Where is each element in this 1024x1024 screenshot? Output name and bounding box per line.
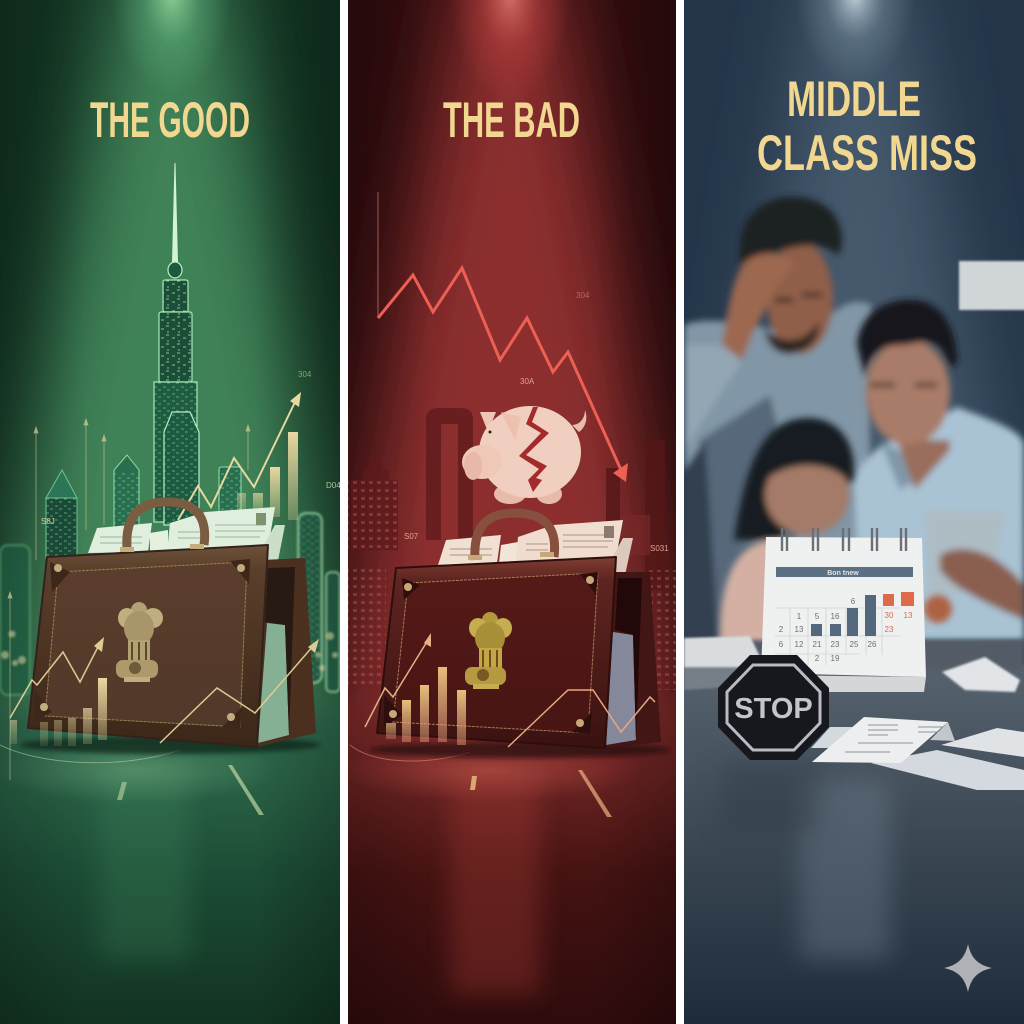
calendar red days xyxy=(883,592,914,606)
icon: right small tower xyxy=(219,467,241,517)
chart: upper rising line and bars: S8J xyxy=(41,517,55,526)
icon: national emblem xyxy=(465,612,512,689)
blurred paper stack xyxy=(684,636,1020,692)
chart: bars and line on case xyxy=(365,633,466,745)
table xyxy=(684,640,1024,1024)
panel: the bad xyxy=(348,0,676,1024)
falling line chart with arrow: S031 xyxy=(650,544,669,553)
title: the good: THE GOOD xyxy=(90,92,250,148)
calendar numbers: 23 xyxy=(831,640,840,649)
calendar numbers: 30 xyxy=(885,611,894,620)
calendar numbers xyxy=(779,597,913,663)
papers xyxy=(88,507,285,560)
calendar numbers: 16 xyxy=(831,612,840,621)
blurred paper on the wall xyxy=(959,261,1024,310)
blurred skyline xyxy=(0,513,340,695)
calendar xyxy=(761,528,926,692)
chart: upper rising line and bars: 304 xyxy=(298,370,312,379)
shirt and shoulders xyxy=(684,302,874,660)
panel: middle class miss xyxy=(684,0,1024,1024)
green background xyxy=(0,0,370,1024)
head xyxy=(767,242,833,354)
floor shadow xyxy=(370,742,670,758)
family, blurred xyxy=(684,197,1024,660)
icon: national emblem xyxy=(116,602,163,682)
floor shadow xyxy=(20,736,320,754)
title: middle class miss: MIDDLE xyxy=(787,71,921,127)
calendar numbers: 5 xyxy=(815,612,820,621)
calendar numbers: 6 xyxy=(851,597,856,606)
icon: cracked piggy bank xyxy=(462,406,586,504)
falling line chart with arrow: S07 xyxy=(404,532,419,541)
father xyxy=(684,197,874,660)
icon: briefcase xyxy=(377,513,661,748)
calendar numbers: 2 xyxy=(815,654,820,663)
child xyxy=(720,418,952,660)
icon: stop sign: STOP xyxy=(734,693,813,725)
icon: sparkle watermark xyxy=(944,944,992,992)
mother xyxy=(854,300,1024,640)
handle xyxy=(127,502,205,548)
calendar numbers: 26 xyxy=(868,640,877,649)
falling line chart with arrow: 30A xyxy=(520,377,535,386)
calendar numbers: 2 xyxy=(779,625,784,634)
chart: overlay line right xyxy=(160,639,319,743)
receipts on table xyxy=(811,717,1024,790)
binder rings xyxy=(782,528,906,551)
corner plates xyxy=(34,559,250,728)
bokeh lights xyxy=(1,630,338,671)
raised hand xyxy=(722,253,795,360)
corner studs xyxy=(40,544,245,721)
handle xyxy=(475,513,555,560)
calendar numbers: 13 xyxy=(795,625,804,634)
city towers xyxy=(46,163,241,558)
chart: overlay line left on case xyxy=(10,637,107,746)
case front xyxy=(377,557,616,748)
red background xyxy=(348,0,676,1024)
case front xyxy=(28,545,268,747)
calendar numbers: 23 xyxy=(885,625,894,634)
papers xyxy=(438,520,633,572)
chart: upper rising line and bars xyxy=(41,370,341,526)
calendar: Bon tnew xyxy=(827,570,859,577)
calendar numbers: 12 xyxy=(795,640,804,649)
corner plates xyxy=(384,572,598,734)
calendar numbers: 1 xyxy=(797,612,802,621)
title: middle class miss xyxy=(757,71,977,181)
chart: overlay line right xyxy=(508,690,655,747)
slate background xyxy=(684,0,1024,720)
icon: briefcase xyxy=(28,502,316,747)
corner studs xyxy=(389,552,594,727)
calendar numbers: 25 xyxy=(850,640,859,649)
icon: mid tower xyxy=(114,455,139,530)
panel: the good xyxy=(0,0,370,1024)
falling line chart with arrow: 304 xyxy=(576,291,590,300)
icon: skyscraper with spire xyxy=(154,163,199,525)
calendar cells xyxy=(775,608,900,665)
calendar bars xyxy=(811,595,876,636)
title: the bad: THE BAD xyxy=(443,92,580,148)
calendar numbers: 19 xyxy=(831,654,840,663)
calendar numbers: 21 xyxy=(813,640,822,649)
side pocket xyxy=(257,558,316,747)
icon: stop sign xyxy=(718,655,829,760)
calendar numbers: 6 xyxy=(779,640,784,649)
thin upward arrows xyxy=(8,419,250,780)
case inner panel xyxy=(45,562,247,727)
chart: upper rising line and bars: D04 xyxy=(326,481,341,490)
falling line chart with arrow xyxy=(378,192,669,553)
calendar numbers: 13 xyxy=(904,611,913,620)
calendar header xyxy=(776,567,913,577)
icon: left tower xyxy=(46,470,77,558)
side pocket xyxy=(605,572,661,748)
case inner panel xyxy=(393,573,598,733)
factory silhouettes xyxy=(348,408,676,690)
